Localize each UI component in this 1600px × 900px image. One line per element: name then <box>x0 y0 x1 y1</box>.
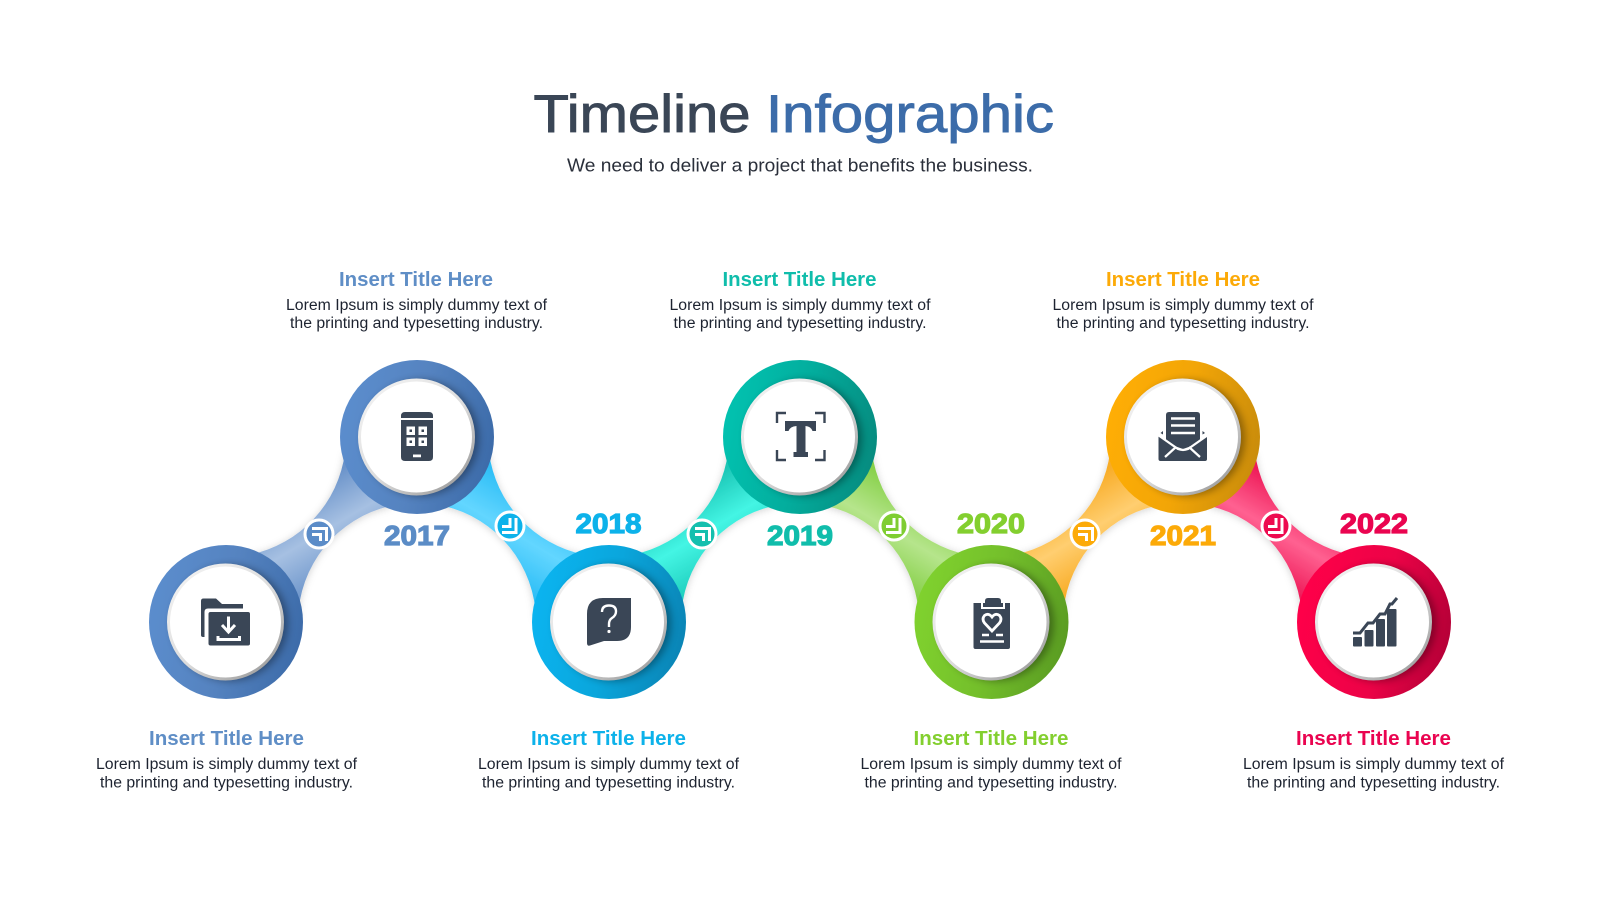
icon: mobile apps <box>401 412 433 461</box>
ring: step 2 <box>340 360 494 514</box>
icon: open envelope <box>1158 412 1208 461</box>
text block: bottom 3: the printing and typesetting industry. <box>864 774 1118 792</box>
node arrow 2 <box>496 512 524 540</box>
text block: bottom 3: Lorem Ipsum is simply dummy text of <box>860 756 1122 773</box>
text block: bottom 4 <box>1243 728 1505 792</box>
year 2019: 2019 <box>767 520 833 551</box>
year 2018: 2018 <box>576 508 642 539</box>
text block: bottom 1 <box>96 728 358 792</box>
text block: top 3: the printing and typesetting industry. <box>1056 315 1310 332</box>
text block: top 2: Insert Title Here <box>722 269 876 291</box>
text block: bottom 1: Insert Title Here <box>149 728 304 750</box>
text block: bottom 3 <box>860 728 1122 792</box>
text block: bottom 1: Lorem Ipsum is simply dummy text of <box>96 756 358 773</box>
text block: top 2: the printing and typesetting industry. <box>674 315 926 332</box>
ring: step 4 <box>723 360 877 514</box>
year 2020: 2020 <box>957 508 1025 539</box>
year 2021: 2021 <box>1150 520 1216 551</box>
text block: bottom 3: Insert Title Here <box>914 728 1068 750</box>
node arrow 4 <box>880 512 908 540</box>
text block: top 3: Insert Title Here <box>1106 269 1260 291</box>
icon: folder download <box>201 598 250 646</box>
icon: question bubble <box>587 598 631 646</box>
text block: bottom 1: the printing and typesetting industry. <box>100 774 353 792</box>
title: Timeline <box>534 85 750 144</box>
text block: top 3: Lorem Ipsum is simply dummy text of <box>1052 297 1314 314</box>
connector: 2019 to 2020 <box>800 437 991 622</box>
text block: bottom 2: the printing and typesetting industry. <box>482 774 735 792</box>
ring: step 5 <box>914 545 1068 699</box>
node arrow 1 <box>305 520 333 548</box>
text block: top 1: Insert Title Here <box>339 269 493 291</box>
text block: top 1: the printing and typesetting industry. <box>290 315 543 332</box>
ring: step 3 <box>532 545 686 699</box>
connector: 2018 to 2019 <box>609 437 800 622</box>
title: Infographic <box>766 85 1054 144</box>
ring: step 6 <box>1106 360 1260 514</box>
text block: top 2: Lorem Ipsum is simply dummy text of <box>670 297 931 314</box>
text block: bottom 2: Lorem Ipsum is simply dummy text of <box>478 756 740 773</box>
connector: 2021 to 2022 <box>1183 437 1374 622</box>
title <box>534 85 1054 144</box>
node arrow 5 <box>1071 520 1099 548</box>
ring: step 7 <box>1297 545 1451 699</box>
text block: bottom 2 <box>478 728 740 792</box>
text block: top 1 <box>286 269 548 332</box>
connector: 2016 to 2017 <box>226 437 417 622</box>
subtitle: We need to deliver a project that benefits the business. <box>567 156 1033 176</box>
text block: bottom 2: Insert Title Here <box>531 728 686 750</box>
text block: bottom 4: Lorem Ipsum is simply dummy text of <box>1243 756 1505 773</box>
ring: step 1 <box>149 545 303 699</box>
text block: bottom 4: Insert Title Here <box>1296 728 1451 750</box>
node arrow 3 <box>688 520 716 548</box>
icon: text frame <box>777 413 824 460</box>
connector: 2020 to 2021 <box>991 437 1182 622</box>
node arrow 6 <box>1262 512 1290 540</box>
year 2017: 2017 <box>384 520 450 551</box>
text block: bottom 4: the printing and typesetting industry. <box>1247 774 1500 792</box>
connector: 2017 to 2018 <box>417 437 608 622</box>
text block: top 2 <box>670 269 931 332</box>
text block: top 1: Lorem Ipsum is simply dummy text of <box>286 297 548 314</box>
icon: clipboard heart <box>974 598 1010 649</box>
icon: rising bar chart <box>1353 598 1397 646</box>
text block: top 3 <box>1052 269 1314 332</box>
year 2022: 2022 <box>1340 508 1408 539</box>
